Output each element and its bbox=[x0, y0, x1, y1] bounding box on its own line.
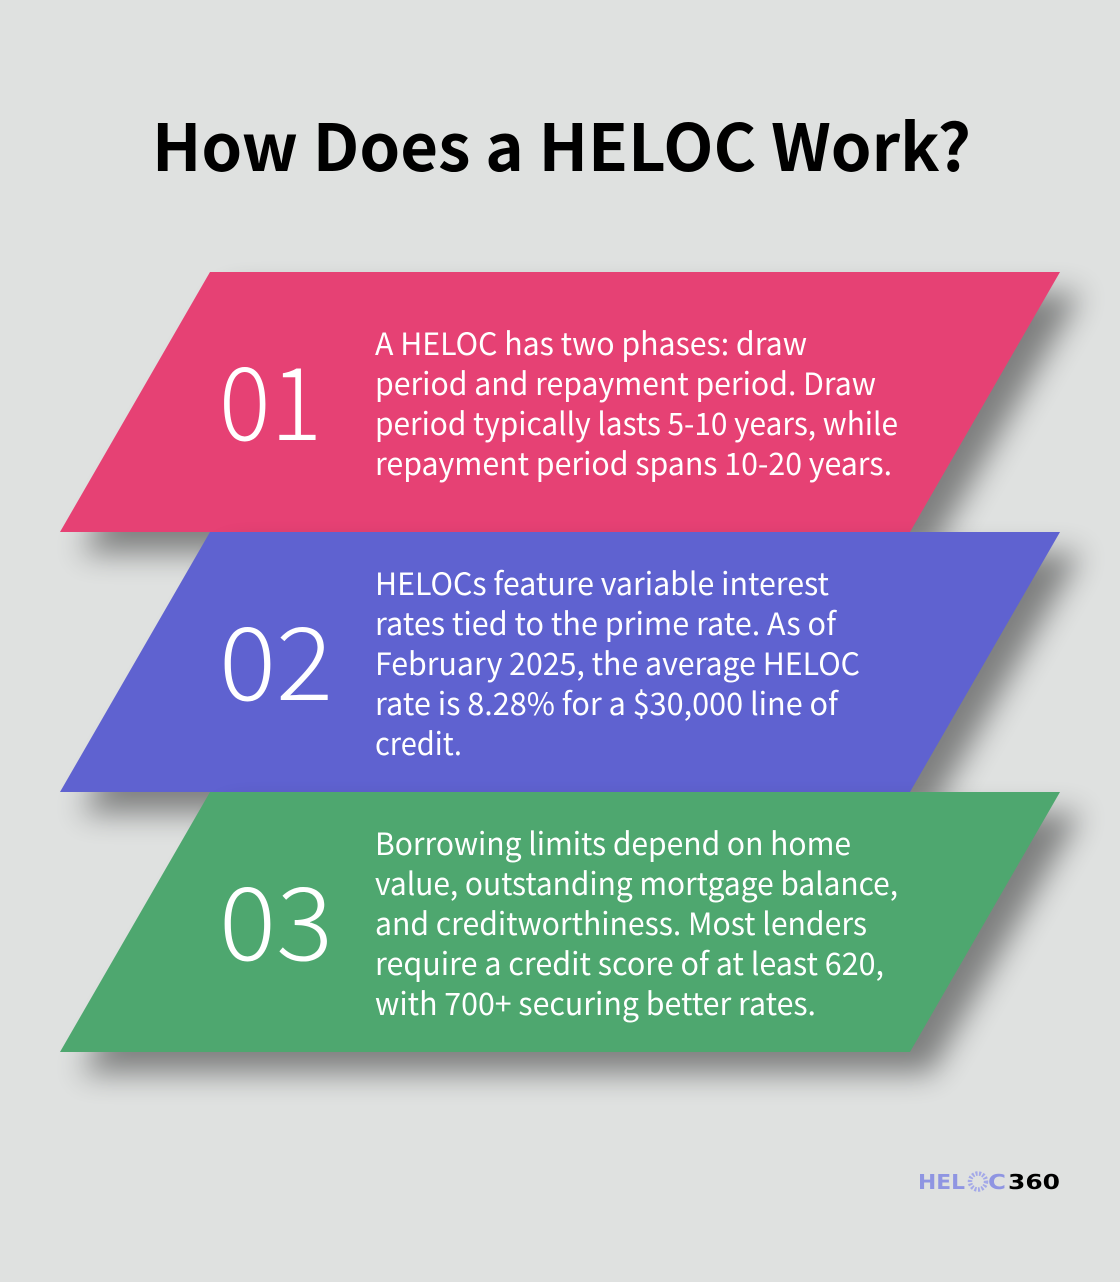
panel: step 1: repayment period spans 10-20 years. bbox=[375, 439, 892, 484]
panel: step 3 bbox=[60, 792, 1081, 1073]
panel: step 2: 02 bbox=[219, 584, 333, 730]
panel: step 1 bbox=[60, 272, 1081, 553]
panel: step 2 bbox=[60, 532, 1081, 813]
panel: step 2: rates tied to the prime rate. As of bbox=[375, 599, 838, 644]
panel: step 2: HELOCs feature variable interest bbox=[375, 559, 829, 604]
panel: step 1: period typically lasts 5-10 years, while bbox=[375, 399, 898, 444]
logo: HELOC360 bbox=[918, 1170, 1060, 1194]
panel: step 3: and creditworthiness. Most lenders bbox=[375, 899, 867, 944]
panel: step 1: period and repayment period. Draw bbox=[375, 359, 876, 404]
panel: step 1: 01 bbox=[219, 324, 322, 470]
title: How Does a HELOC Work? bbox=[152, 96, 971, 190]
panel: step 3: with 700+ securing better rates. bbox=[375, 979, 816, 1024]
panel: step 2: credit. bbox=[375, 719, 462, 764]
logo: HELOC360: C bbox=[988, 1170, 1006, 1194]
logo: HELOC360: HEL bbox=[918, 1170, 965, 1194]
panel: step 1: A HELOC has two phases: draw bbox=[375, 319, 807, 364]
logo: HELOC360: 360 bbox=[1008, 1170, 1060, 1194]
panel: step 2: February 2025, the average HELOC bbox=[375, 639, 860, 684]
panel: step 3: Borrowing limits depend on home bbox=[375, 819, 851, 864]
panel: step 3: 03 bbox=[219, 844, 333, 990]
panel: step 2: rate is 8.28% for a $30,000 line of bbox=[375, 679, 840, 724]
panel: step 3: value, outstanding mortgage balance, bbox=[375, 859, 898, 904]
panel: step 3: require a credit score of at least 620, bbox=[375, 939, 884, 984]
